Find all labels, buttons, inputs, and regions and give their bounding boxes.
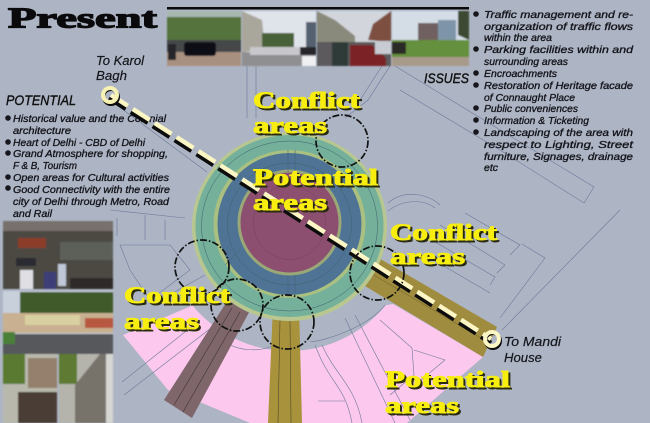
heading: issues: ISSUES [424,70,470,86]
heading: potential: POTENTIAL [6,92,76,108]
label: conflict areas top: Conflict [255,90,362,115]
title: Present [8,2,158,34]
text block: issues list: Parking facilities within and [484,44,634,56]
photo: cinema building [3,354,57,423]
label: conflict areas right: Conflict [390,220,497,245]
photo: street with red car [317,11,391,66]
text block: issues list: of Connaught Place [484,92,575,104]
label: potential areas bottom [385,367,512,420]
text block: potential list: Heart of Delhi - CBD of Delhi [13,137,146,149]
text block: issues list: within the area [484,32,552,44]
text block: issues list: Encroachments [484,68,558,80]
label: conflict areas top: Conflict [253,88,360,113]
text block: issues list: Public conveniences [484,103,579,115]
map: road to Mandi House [355,253,497,357]
photo: shopfront street [3,291,113,354]
icon: Mandi House end ring [485,332,500,348]
label: potential areas bottom: areas [387,395,461,420]
text block: issues list: furniture, Signages, drainage [484,151,633,163]
text block: potential list [5,113,170,220]
photo: parked car under trees [167,11,241,66]
text block: issues list: Landscaping of the area with [484,127,633,139]
text block: potential list: Grand Atmosphere for shopping, [13,148,168,160]
photo: interior crowd [3,221,113,289]
text block: issues list: Restoration of Heritage facade [484,80,633,92]
photo strip [167,7,469,66]
label: potential areas centre [253,165,380,217]
label: potential areas centre: Potential [255,167,380,192]
label: conflict areas top [253,88,362,140]
label: conflict areas right [390,220,499,271]
label: potential areas bottom: Potential [387,369,512,394]
text block: issues list: etc [484,162,499,174]
label: To Mandi House: To Mandi [504,335,562,349]
label: conflict areas right: areas [392,246,467,271]
map: south-west road [164,295,253,418]
label: To Karol Bagh: To Karol [96,54,145,68]
label: potential areas bottom: areas [385,393,459,418]
label: potential areas centre: Potential [253,165,378,190]
map: pink zones [123,304,483,423]
photo: multistorey building [59,354,113,423]
label: potential areas centre: areas [253,190,327,215]
map: street lines [110,66,620,423]
text block: potential list: Open areas for Cultural activities [13,172,170,184]
label: conflict areas right: areas [390,244,465,269]
label: To Karol Bagh [96,54,145,83]
label: conflict areas top: areas [255,115,329,140]
text block: potential list: architecture [13,125,71,137]
label: potential areas bottom: Potential [385,367,510,392]
text block: issues list: organization of traffic flows [484,21,634,33]
text block: potential list: and Rail [13,208,53,220]
map: concentric circle plan [192,132,387,321]
text block: potential list: F & B, Tourism [13,160,77,172]
text block: potential list: city of Delhi through Metro, Road [13,196,170,208]
label: conflict areas top: areas [253,113,327,138]
label: potential areas centre: areas [255,192,329,217]
map: outer grey ring [164,101,414,351]
left photo column [3,221,113,423]
label: conflict areas left: areas [124,309,199,334]
label: To Mandi House: House [504,351,542,365]
text block: issues list: Information & Ticketing [484,115,589,127]
label: To Mandi House [504,335,562,365]
map: south road [268,305,302,423]
label: conflict areas left: Conflict [126,285,232,310]
text block: issues list: Traffic management and re- [484,9,634,21]
label: conflict areas left [124,283,232,336]
photo: open green with towers [392,11,469,66]
text block: issues list: surrounding areas [484,56,569,68]
label: conflict areas left: Conflict [124,283,230,308]
photo: colonnade with cars [242,11,316,66]
conflict circles [175,115,404,349]
label: To Karol Bagh: Bagh [96,69,127,83]
label: conflict areas left: areas [126,311,201,336]
label: conflict areas right: Conflict [392,222,499,247]
text block: potential list: Good Connectivity with the entire [13,184,170,196]
text block: potential list: Historical value and the Colonial [13,113,167,125]
text block: issues list [473,9,634,174]
arrow: dashed route Karol Bagh to Mandi House [103,88,500,348]
icon: Karol Bagh end ring [103,88,118,104]
text block: issues list: respect to Lighting, Street [484,139,634,151]
